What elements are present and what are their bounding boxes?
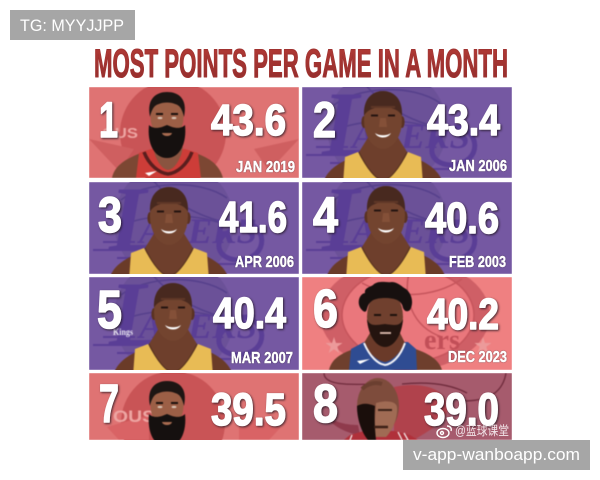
panel: rank 8 Jordan xyxy=(302,373,512,440)
panel art: Lakers: Kings xyxy=(113,327,133,337)
panel art: Lakers xyxy=(89,182,299,274)
watermark: bottom right xyxy=(403,440,590,470)
date: FEB 2003 xyxy=(449,254,506,271)
panel art: Lakers xyxy=(89,277,299,370)
panel: rank 3 Kobe xyxy=(89,182,299,274)
panel art: Rockets: OUS xyxy=(113,407,155,426)
points value: 39.0 xyxy=(424,384,499,435)
panel art: Lakers xyxy=(302,182,512,274)
rank number: 5 xyxy=(97,280,122,340)
panel art: Lakers xyxy=(302,87,512,178)
rank number: 7 xyxy=(99,374,119,434)
rank number: 2 xyxy=(313,92,336,148)
watermark: top left: TG: MYYJJPP xyxy=(20,16,124,35)
points value: 40.6 xyxy=(425,194,499,243)
panel background: Rockets xyxy=(89,87,299,178)
rank number: 4 xyxy=(313,187,338,243)
date: JAN 2006 xyxy=(449,158,507,175)
points value: 41.6 xyxy=(219,193,287,242)
date: JAN 2019 xyxy=(236,159,295,176)
icon: weibo eye xyxy=(437,426,451,438)
points value: 40.2 xyxy=(427,290,499,339)
watermark: top left xyxy=(10,10,135,40)
points value: 43.6 xyxy=(211,96,286,145)
rank number: 1 xyxy=(99,92,118,148)
panel: rank 6 Embiid xyxy=(302,277,512,370)
rank number: 3 xyxy=(98,187,122,243)
weibo handle: @蓝球课堂 xyxy=(455,424,509,438)
panel: rank 1 Harden xyxy=(89,87,299,178)
panel: rank 7 Harden xyxy=(89,373,299,440)
rank number: 6 xyxy=(313,279,338,339)
panel art: 76ers: ers xyxy=(424,325,460,356)
panel: rank 5 Kobe xyxy=(89,277,299,370)
rank number: 8 xyxy=(313,374,338,434)
panel art: Bulls xyxy=(302,373,512,440)
points value: 43.4 xyxy=(427,96,500,145)
date: MAR 2007 xyxy=(231,350,293,367)
points value: 39.5 xyxy=(211,384,286,435)
date: DEC 2023 xyxy=(448,349,507,366)
points value: 40.4 xyxy=(213,289,286,338)
panel art: Rockets xyxy=(89,373,299,440)
panel: rank 2 Kobe xyxy=(302,87,512,178)
panel art: 76ers xyxy=(302,277,512,370)
watermark: bottom right: v-app-wanboapp.com xyxy=(413,445,580,464)
panel: rank 4 Kobe xyxy=(302,182,512,274)
panel background: Rockets: OUS xyxy=(102,125,138,142)
date: APR 2006 xyxy=(235,254,294,271)
